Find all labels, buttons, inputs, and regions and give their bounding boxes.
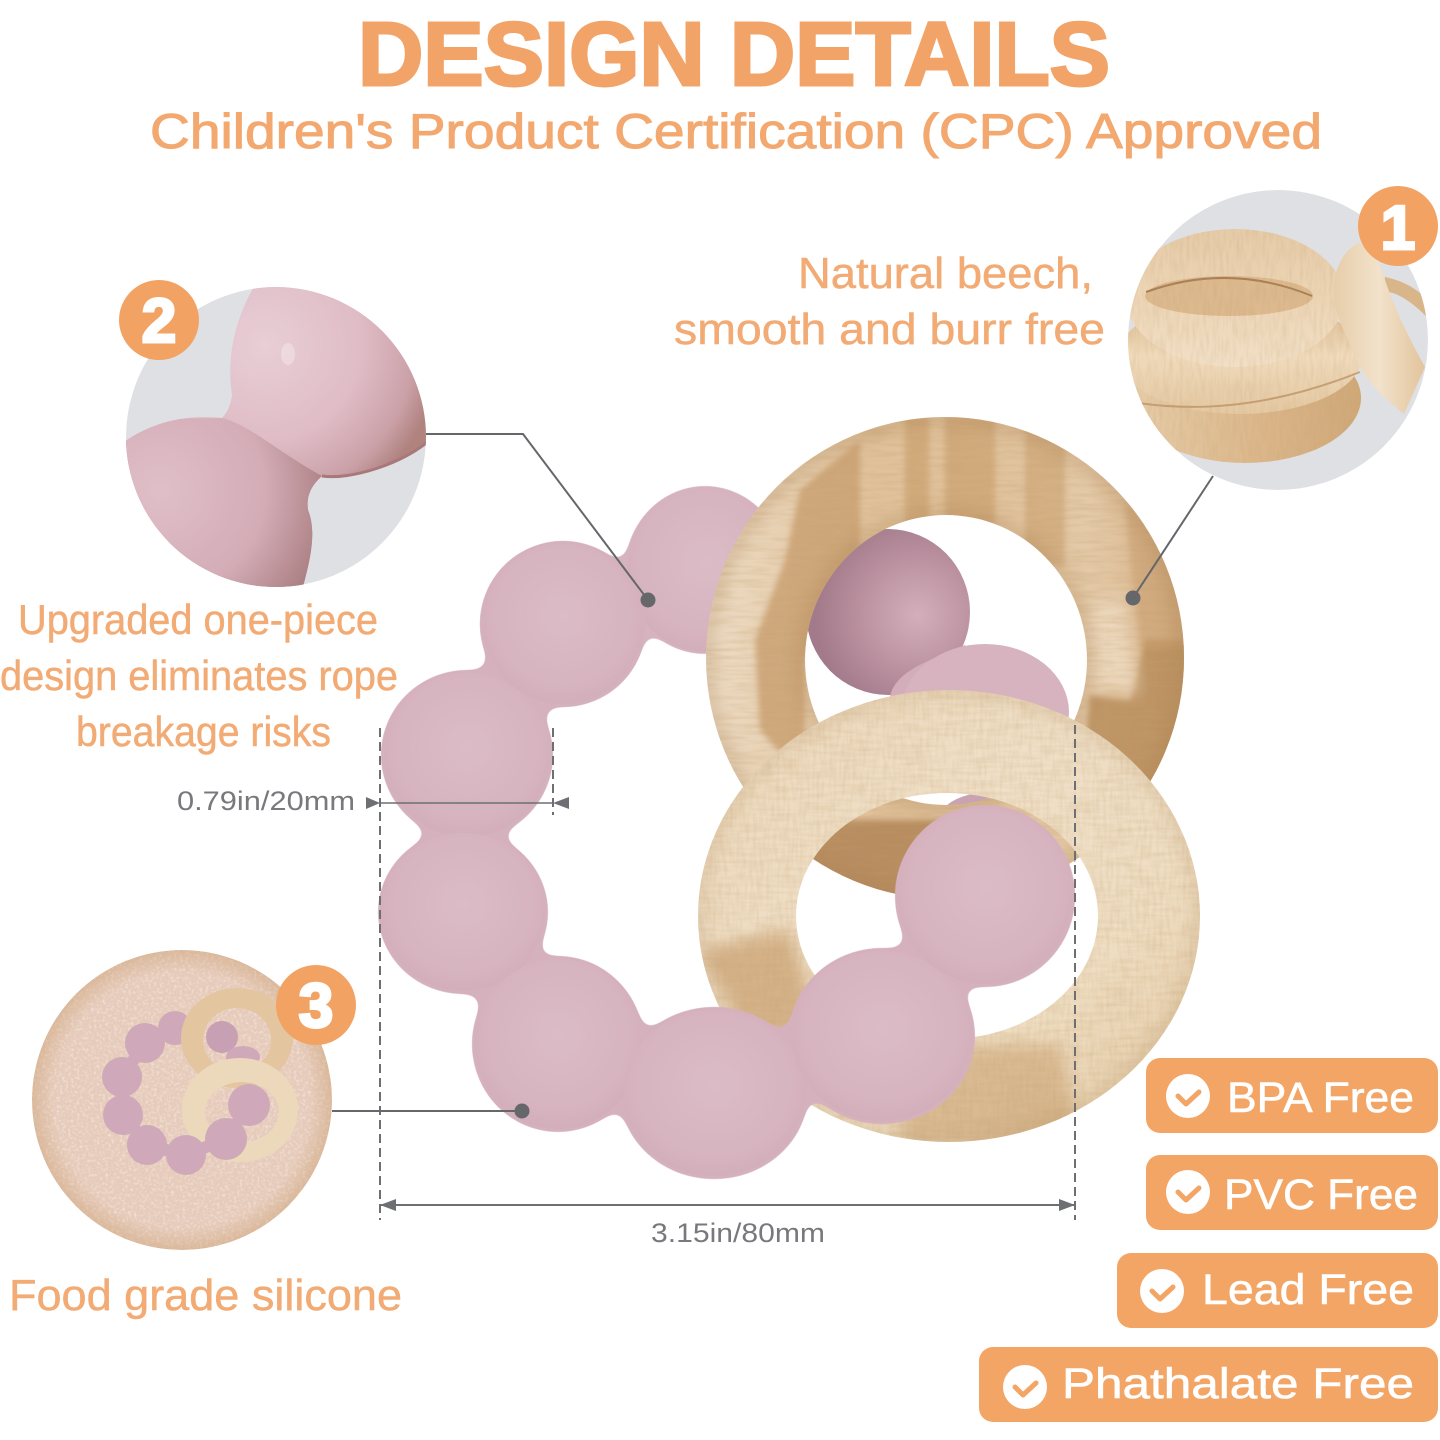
- caption 2: Upgraded one-piece: [18, 596, 378, 643]
- badge 1: [1358, 186, 1438, 266]
- panel: food grade silicone detail: [9, 950, 402, 1320]
- pill: BPA Free: BPA Free: [1227, 1074, 1414, 1122]
- caption 1: Natural beech,: [798, 249, 1093, 298]
- dimension guides: [366, 725, 1075, 1220]
- caption 2: breakage risks: [76, 708, 331, 755]
- dimension label: ring hole: 0.79in/20mm: [177, 786, 355, 816]
- photo circle: stacked wooden rings: [1118, 190, 1428, 490]
- badge 2: [119, 280, 199, 360]
- panel: one-piece design detail: [0, 280, 430, 755]
- panel: natural beech detail: [674, 186, 1438, 490]
- badge 3: [276, 965, 356, 1045]
- subtitle: Children's Product Certification (CPC) Approved: [150, 105, 1322, 159]
- badge 3: 3: [299, 972, 333, 1041]
- pill: Phathalate Free: [979, 1347, 1438, 1422]
- pill: Phathalate Free: Phathalate Free: [1062, 1360, 1414, 1408]
- teether product illustration: [378, 417, 1200, 1179]
- photo circle: silicone close-up: [120, 285, 430, 605]
- pill: PVC Free: [1146, 1155, 1438, 1230]
- wooden ring: lower: [698, 690, 1200, 1145]
- photo circle: teether on sand: [32, 950, 332, 1250]
- pill: Lead Free: [1117, 1253, 1438, 1328]
- pill: Lead Free: Lead Free: [1202, 1266, 1414, 1314]
- badge 2: 2: [142, 287, 176, 356]
- pill: BPA Free: [1146, 1058, 1438, 1133]
- caption 1: [674, 249, 1105, 354]
- title: DESIGN DETAILS: [358, 5, 1110, 105]
- dimension label: width: 3.15in/80mm: [651, 1218, 825, 1248]
- pill: PVC Free: PVC Free: [1224, 1171, 1418, 1219]
- caption 3: Food grade silicone: [9, 1271, 402, 1320]
- callout leader lines: [332, 434, 1213, 1118]
- silicone beads behind wooden rings: [480, 486, 1080, 862]
- wooden ring: upper: [706, 417, 1190, 907]
- caption 1: smooth and burr free: [674, 305, 1105, 354]
- silicone beads in front: [378, 541, 1075, 1179]
- badge 1: 1: [1381, 194, 1415, 263]
- caption 2: design eliminates rope: [0, 652, 398, 699]
- caption 2: [0, 596, 398, 755]
